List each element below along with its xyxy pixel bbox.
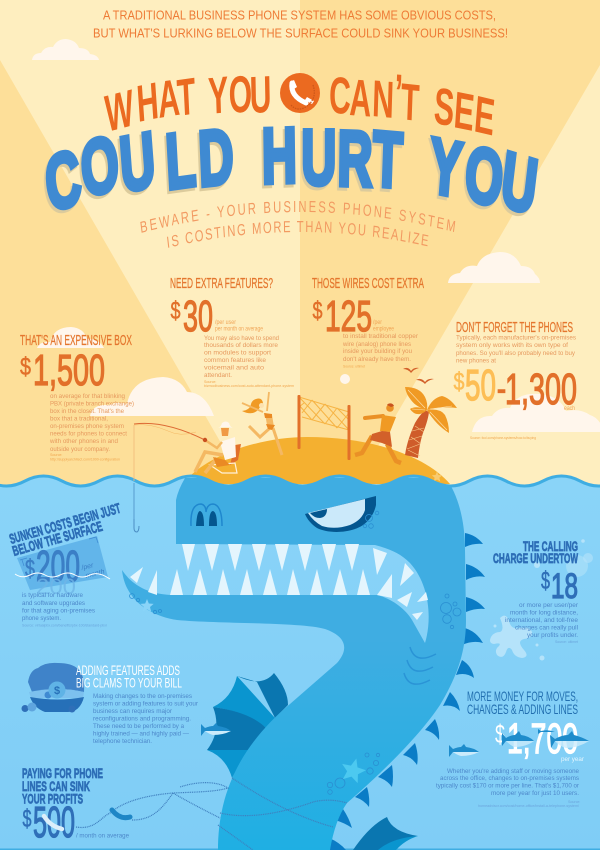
subtitle arc	[140, 201, 456, 248]
panel: extra features: attendant.	[204, 372, 232, 379]
panel: moves and changes: per year	[561, 757, 584, 763]
panel: wires: THOSE WIRES COST EXTRA	[312, 276, 424, 292]
panel: moves and changes	[436, 688, 584, 808]
panel: sunken costs: 200	[36, 574, 76, 599]
panel: phone lines	[22, 765, 130, 847]
panel: wires: don't already have them.	[343, 356, 411, 363]
eye	[305, 496, 376, 532]
panel: expensive box: outside your company.	[50, 446, 110, 453]
island star	[432, 472, 442, 481]
panel: calling charge: $	[541, 567, 550, 595]
panel: expensive box: http://supplyarchitect.com/1000-configuration	[50, 458, 120, 462]
panel: sunken costs: for that aging on-premises	[22, 608, 95, 614]
panel: moves and changes: more per year for just 10 users.	[491, 790, 579, 797]
panel: extra features: NEED EXTRA FEATURES?	[170, 276, 273, 292]
panel: phones	[454, 320, 577, 440]
panel: expensive box: $	[20, 353, 31, 381]
panel: expensive box: on-premises phone system	[50, 423, 124, 430]
panel: calling charge: or more per user/per	[519, 602, 578, 609]
panel: moves and changes: across the office, changes to on-premises systems	[440, 775, 579, 782]
panel: wires: inside your building if you	[343, 348, 413, 355]
panel: wires: to install traditional copper	[343, 333, 418, 340]
panel: adding features: highly trained — and highly paid —	[93, 730, 190, 738]
panel: wires	[312, 276, 424, 368]
panel: expensive box: Source:	[50, 453, 62, 457]
panel: sunken costs: month	[85, 568, 105, 580]
panel: phone lines: $	[22, 805, 32, 833]
gills	[404, 647, 436, 684]
panel: moves and changes: $	[495, 719, 505, 749]
panel: expensive box: needs for phones to connect	[50, 430, 127, 438]
panel: wires: 125	[325, 292, 372, 341]
panel: phones: -	[497, 371, 506, 407]
palm tree	[405, 387, 457, 458]
panel: phones: phones. So you'll also probably need to buy	[456, 350, 576, 357]
body star	[342, 758, 366, 783]
panel: extra features: You may also have to spend	[204, 335, 280, 342]
panel: sunken costs: phone system.	[22, 615, 61, 622]
panel: adding features: system or adding features to suit your	[93, 700, 198, 708]
panel: adding features: Making changes to the on-premises	[93, 693, 192, 700]
panel: sunken costs: SUNKEN COSTS BEGIN JUST	[7, 500, 123, 547]
panel: expensive box: box that a traditional,	[50, 416, 108, 422]
large cloud left	[90, 377, 214, 416]
panel: phone lines: 500	[33, 798, 75, 847]
icon: clam: $	[54, 685, 60, 697]
panel: extra features: common features like	[204, 357, 267, 364]
panel: phones: Typically, each manufacturer's on-premises	[456, 334, 576, 342]
back spikes	[328, 533, 485, 850]
bubbles	[130, 511, 461, 794]
panel: moves and changes: typically cost $170 or more per line. That's $1,700 or	[436, 782, 579, 790]
fish one	[201, 723, 231, 736]
panel: sunken costs: Source: virtualpbx.com/benefits/pbx-100/standard-pbx/	[22, 624, 107, 628]
panel: expensive box	[20, 333, 134, 462]
panel: extra features: /per user	[215, 320, 236, 326]
panel: calling charge: your profits under.	[527, 632, 578, 639]
panel: moves and changes: Whether you're adding staff or moving someone	[447, 768, 580, 775]
man playing volleyball	[355, 403, 401, 463]
panel: sunken costs: /per	[80, 562, 95, 572]
panel: extra features: voicemail and auto	[204, 364, 265, 372]
panel: adding features: These need to be performed by a	[93, 723, 185, 730]
panel: extra features: per month on average	[215, 326, 264, 332]
panel: wires: Source: ultimet	[343, 364, 365, 368]
panel: expensive box: PBX (private branch exchange)	[50, 400, 134, 408]
panel: extra features: on modules to support	[204, 350, 271, 356]
panel: wires: /per	[373, 320, 382, 326]
ball	[340, 374, 350, 384]
phone cords	[76, 778, 347, 850]
intro text	[93, 8, 508, 40]
panel: extra features: thousands of dollars more	[204, 342, 279, 349]
panel: wires: $	[312, 297, 323, 325]
cloud behind expensive box	[37, 327, 104, 348]
icon: phone circle	[280, 73, 320, 113]
panel: sunken costs: BELOW THE SURFACE	[10, 518, 104, 559]
panel: phone lines: LINES CAN SINK	[22, 778, 90, 794]
panel: phones: new phones at	[456, 358, 496, 364]
panel: expensive box: THAT'S AN EXPENSIVE BOX	[20, 333, 132, 349]
lower teeth	[130, 567, 428, 620]
panel: wires: wire (analog) phone lines	[342, 341, 411, 348]
sea	[0, 476, 600, 850]
cloud top right	[448, 252, 540, 283]
panel: expensive box: with other phones in and	[49, 438, 119, 445]
panel: phones: Source: fool.com/phone-systems/how-to/buying	[470, 436, 536, 440]
subtitle arc: BEWARE - YOUR BUSINESS PHONE SYSTEM	[140, 201, 456, 233]
jaw star	[140, 599, 154, 612]
panel: phones: $	[454, 368, 465, 396]
panel: adding features: BIG CLAMS TO YOUR BILL	[76, 674, 182, 690]
nostrils	[191, 504, 222, 526]
subtitle arc: IS COSTING MORE THAN YOU REALIZE	[167, 221, 428, 248]
panel: phone lines: PAYING FOR PHONE	[22, 765, 103, 781]
bubbles splash	[494, 539, 593, 660]
panel: adding features: reconfigurations and programming.	[93, 716, 191, 722]
panel: expensive box: on average for that blinking	[50, 393, 126, 400]
panel: phones: 50	[465, 361, 496, 410]
upper teeth	[182, 544, 414, 586]
fish five	[550, 731, 589, 748]
panel: phones: system only works with its own type of	[456, 342, 568, 349]
whale	[122, 478, 466, 850]
panel: moves and changes: homeadvisor.com/cost/home-office/install-a-telephone-system/	[478, 804, 579, 808]
panel: calling charge: Source: ultimet	[555, 640, 578, 644]
panel: extra features	[170, 276, 294, 388]
woman jumping	[242, 392, 282, 455]
panel: phones: each	[564, 406, 575, 412]
panel: moves and changes: Source:	[568, 800, 580, 804]
panel: phone lines: / month on average	[76, 832, 130, 840]
panel: calling charge: charges can really pull	[515, 624, 578, 632]
panel: expensive box: box in the closet. That's the	[50, 408, 125, 415]
fisherman	[134, 422, 241, 473]
fish three	[502, 731, 534, 747]
panel: sunken costs: $	[25, 555, 35, 583]
panel: calling charge: 18	[551, 567, 578, 606]
panel: adding features: ADDING FEATURES ADDS	[76, 662, 180, 678]
icon: clam	[22, 663, 84, 712]
panel: adding features	[76, 662, 198, 745]
panel: calling charge: international, and toll-free	[505, 617, 579, 624]
whale body	[122, 478, 466, 850]
panel: phone lines: YOUR PROFITS	[22, 790, 83, 806]
title: could hurt you: COULD HURT YOU	[41, 111, 542, 231]
fish two	[449, 744, 479, 757]
cloud right	[472, 394, 600, 432]
panel: expensive box: 1,500	[33, 346, 105, 395]
panel: sunken costs	[7, 500, 123, 628]
island	[183, 437, 450, 484]
panel: wires: employee	[373, 326, 395, 332]
panel: sunken costs: and software upgrades	[22, 600, 85, 607]
panel: extra features: $	[170, 297, 181, 325]
volleyball net	[298, 395, 350, 460]
panel: adding features: telephone technician.	[93, 738, 152, 745]
panel: sunken costs: is typical for hardware	[22, 592, 84, 599]
cloud top left	[32, 39, 99, 60]
intro text: BUT WHAT'S LURKING BELOW THE SURFACE COULD SINK YOUR BUSINESS!	[93, 26, 508, 40]
panel: calling charge: month for long distance,	[510, 610, 578, 616]
panel: adding features: business can requires major	[93, 708, 172, 715]
intro text: A TRADITIONAL BUSINESS PHONE SYSTEM HAS SOME OBVIOUS COSTS,	[103, 8, 496, 22]
panel: extra features: 30	[183, 292, 213, 341]
panel: calling charge	[493, 538, 579, 644]
splash	[490, 616, 532, 658]
panel: extra features: Source:	[204, 380, 216, 384]
title: what you can't see: WHAT YOU CAN’T SEE	[103, 65, 497, 148]
birds	[403, 368, 434, 384]
left fin	[207, 673, 288, 778]
fish four	[538, 729, 555, 734]
bottom fin	[353, 817, 418, 850]
fishing line and hook	[134, 425, 139, 532]
panel: extra features: bizmodbusiness.com/cost-auto-attendant-phone-system	[204, 384, 294, 388]
icon: white handset	[44, 816, 62, 829]
panel: sunken costs: 200	[36, 542, 80, 591]
icon: blue handset	[112, 810, 130, 818]
